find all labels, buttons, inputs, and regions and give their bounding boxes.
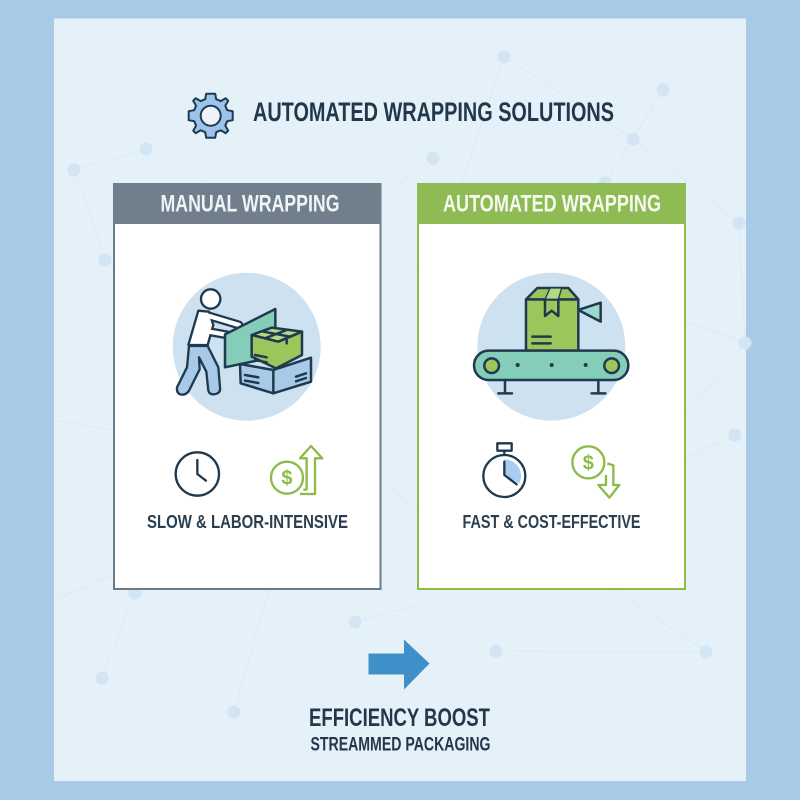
icon: falling cost	[572, 446, 619, 498]
caption: fast and cost-effective: FAST & COST-EFFECTIVE	[462, 511, 640, 532]
caption: slow and labor-intensive: SLOW & LABOR-INTENSIVE	[147, 511, 348, 532]
title: AUTOMATED WRAPPING SOLUTIONS	[253, 97, 614, 127]
icon: rising cost	[271, 446, 322, 494]
automated heading: AUTOMATED WRAPPING	[443, 190, 661, 218]
icon: falling cost: $	[583, 452, 594, 474]
automated header bar	[417, 183, 686, 224]
heading: efficiency boost: EFFICIENCY BOOST	[309, 704, 490, 732]
arrow: efficiency direction	[368, 640, 430, 690]
manual header bar	[113, 183, 381, 224]
icon: gear	[189, 94, 233, 138]
manual heading: MANUAL WRAPPING	[160, 190, 340, 218]
panel: manual wrapping	[113, 183, 381, 589]
panel: automated wrapping	[417, 183, 686, 589]
icon: clock	[176, 452, 219, 496]
icon: rising cost: $	[281, 468, 293, 490]
illustration: conveyor belt	[474, 273, 628, 421]
subheading: streammed packaging: STREAMMED PACKAGING	[310, 734, 490, 756]
illustration: worker wrapping boxes	[173, 273, 321, 421]
icon: stopwatch	[483, 443, 525, 497]
